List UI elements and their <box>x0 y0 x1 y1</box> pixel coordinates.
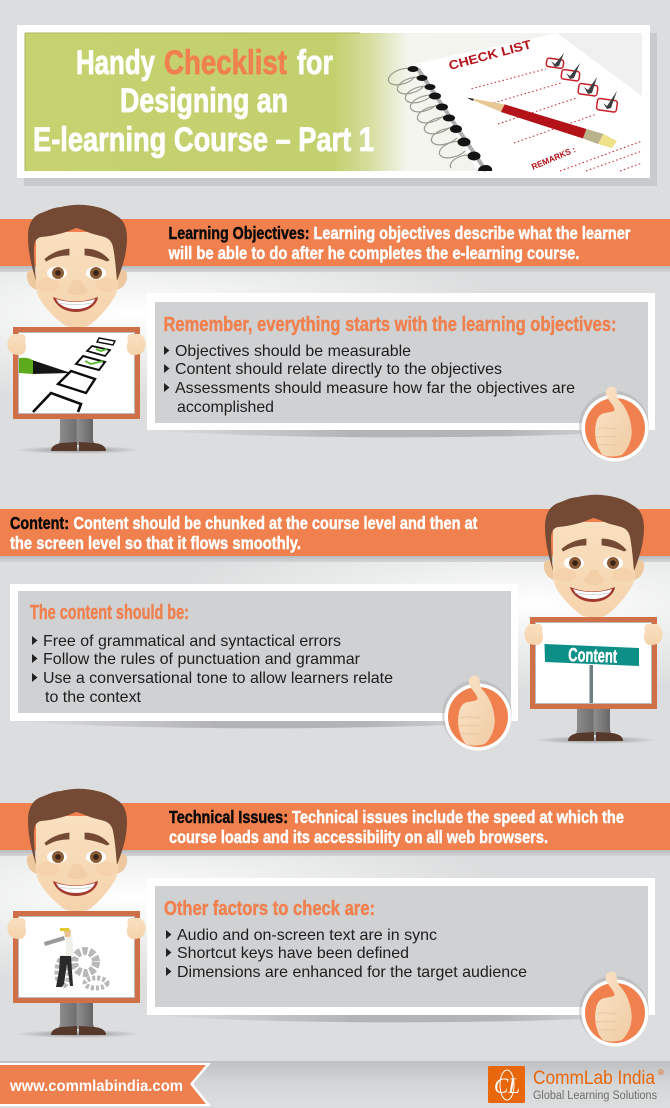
band text: Content: <box>10 513 69 533</box>
title banner <box>17 25 657 186</box>
bullet list: Assessments should measure how far the objectives are <box>175 380 575 397</box>
character holding board <box>7 789 146 1038</box>
bullet list <box>32 633 393 706</box>
orange header band <box>0 219 670 272</box>
title text <box>33 44 374 159</box>
bullet list <box>164 343 575 416</box>
board drawing: checklist and pen <box>19 338 115 412</box>
company name: CommLab India <box>533 1068 655 1089</box>
band text: course loads and its accessibility on all web browsers. <box>169 827 548 847</box>
title text: E-learning Course – Part 1 <box>33 121 374 159</box>
board drawing: engineer with gears <box>44 928 107 988</box>
checklist notepad illustration <box>388 33 642 172</box>
footer <box>0 1061 670 1108</box>
bullet list: Shortcut keys have been defined <box>177 945 409 962</box>
title text: Designing an <box>120 82 288 120</box>
character holding board <box>7 205 146 454</box>
bullet list <box>166 927 527 981</box>
bullet list: Audio and on-screen text are in sync <box>177 927 437 944</box>
ribbon: website <box>0 1063 211 1106</box>
orange header band <box>0 803 670 856</box>
registered mark: ® <box>658 1068 664 1077</box>
remarks label: REMARKS : <box>530 144 577 172</box>
bullet list: Free of grammatical and syntactical errors <box>43 633 341 650</box>
icon: thumbs up <box>442 676 512 750</box>
title text: Checklist <box>164 44 287 82</box>
heading: check list: CHECK LIST <box>447 37 533 73</box>
icon: thumbs up <box>579 972 649 1046</box>
bullet list: Content should relate directly to the objectives <box>175 361 502 378</box>
bullet list: Dimensions are enhanced for the target audience <box>177 964 527 981</box>
logo: CommLab India <box>488 1066 664 1103</box>
title text: Handy <box>76 44 155 82</box>
character holding board <box>524 495 663 744</box>
bullet list: Follow the rules of punctuation and grammar <box>43 651 361 668</box>
section 3: technical issues <box>0 789 670 1046</box>
dotted lines <box>472 69 642 171</box>
section 1: learning objectives <box>0 205 670 462</box>
logo mark: CL <box>494 1073 520 1098</box>
band text: Learning Objectives: <box>168 223 310 243</box>
pencil <box>467 98 617 148</box>
section backdrop <box>0 556 670 746</box>
section backdrop <box>0 850 670 1040</box>
logo mark <box>488 1066 525 1103</box>
band text <box>10 513 478 553</box>
orange header band <box>0 509 670 562</box>
bullet list: Use a conversational tone to allow learners relate <box>43 670 393 687</box>
panel heading: Other factors to check are: <box>164 898 375 920</box>
title text: for <box>297 44 333 82</box>
band text: Technical Issues: <box>169 807 288 827</box>
band text: the screen level so that it flows smoothly. <box>10 533 301 553</box>
section 2: content <box>0 495 670 750</box>
icon: thumbs up <box>579 387 649 462</box>
ribbon: website: www.commlabindia.com <box>9 1078 183 1095</box>
panel: other factors <box>147 878 655 1022</box>
check boxes <box>546 53 618 112</box>
band text <box>168 223 631 263</box>
bullet list: Objectives should be measurable <box>175 343 411 360</box>
panel heading: The content should be: <box>30 602 189 624</box>
band text: Content should be chunked at the course level and then at <box>74 513 478 533</box>
tagline: Global Learning Solutions <box>533 1090 657 1102</box>
section backdrop <box>0 266 670 456</box>
panel: content qualities <box>10 584 518 728</box>
board drawing: content street sign <box>544 644 639 703</box>
panel: objectives checklist <box>147 293 655 437</box>
band text: will be able to do after he completes the e-learning course. <box>168 243 580 263</box>
spiral binding <box>388 68 475 168</box>
bullet list: to the context <box>45 689 142 706</box>
band text <box>169 807 624 847</box>
bullet list: accomplished <box>177 399 274 416</box>
board drawing: content street sign: Content <box>568 645 618 668</box>
